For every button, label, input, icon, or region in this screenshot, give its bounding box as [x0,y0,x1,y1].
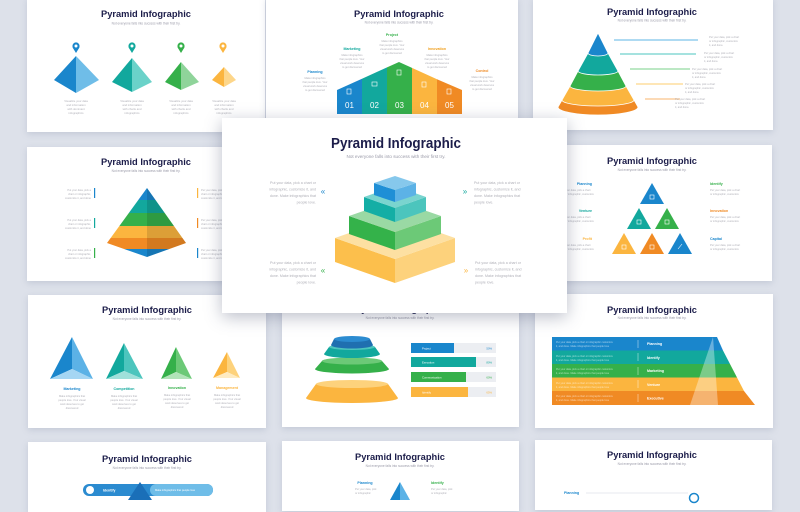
title: Pyramid Infographic [607,450,697,460]
title: Pyramid Infographic [101,9,191,19]
text blocks: infographics [68,111,84,115]
chart: progress bars: Communication [422,376,442,380]
text blocks: it, and done. [685,90,700,94]
text blocks: that people love. Your [425,57,450,61]
text blocks: or infographic, customize [704,55,733,59]
text blocks: Put your data, pick a chart [692,67,722,71]
slide: four 3D pyramids [28,295,266,428]
title: Not everyone falls into success with their first try. [618,18,686,22]
text: bottom-right: Put your data, pick a chart or [475,261,522,265]
chart: house bars [337,62,462,114]
text blocks: Make infographics that [164,393,190,397]
slide: bottom-right [535,440,772,510]
side text: Put your data, pick a [201,188,225,192]
text blocks: work deserves to get [165,401,189,405]
chart: bands: it, and done. Make infographics that people love [556,386,610,389]
text blocks: Make infographics [304,76,326,80]
text blocks: Put your data, pick a chart [709,35,739,39]
side text: Put your data, pick a [201,218,225,222]
title [102,305,192,321]
side text: chart or infographic, [201,222,224,226]
text blocks: it, and done. [675,105,690,109]
text blocks: Visualize your data [64,99,88,103]
side text: Put your data, pick a [67,188,92,192]
main slide: 3D stacked pyramid [222,118,567,313]
text blocks: that people love. Your [380,43,405,47]
text blocks [58,393,241,410]
labels: Profit [583,237,593,241]
chart: discs [306,336,398,403]
chart: bands: Put your data, pick a chart or infographic customize [556,341,613,344]
text: bottom-left: people love. [297,280,316,284]
text blocks: to get discovered [382,51,402,55]
slide: stacked discs with progress bars [282,294,519,427]
text blocks: visual work deserves [340,61,365,65]
chart: house bars: 02 [370,101,379,110]
text blocks: your data, pick a chart [565,215,591,219]
chart: bands: Put your data, pick a chart or infographic customize [556,355,613,358]
chart: bands: Put your data, pick a chart or infographic customize [556,395,613,398]
side text: customize it, and done [65,226,92,230]
text blocks: Put your data, pick a chart [675,97,705,101]
side text: Put your data, pick a [201,248,225,252]
slide: triangle grid [535,145,772,281]
bar: identify: Make infographics that people love [155,488,196,492]
chart: house bars: 01 [345,101,354,110]
text blocks: it, and done. [709,43,724,47]
chart: progress bars: 80% [486,360,493,364]
labels: Innovation [710,209,728,213]
text: top-left: infographic, customize it, and [269,188,316,192]
text: top-left: Put your data, pick a chart or [270,181,317,185]
text blocks: Make infographics [381,39,403,43]
title: Not everyone falls into success with their first try. [618,462,686,466]
text: bottom-left [269,261,317,284]
text: top-right: Put your data, pick a chart or [474,181,521,185]
text blocks: and information [122,103,142,107]
text blocks: discovered [66,406,79,410]
title [354,9,444,24]
side text [65,188,228,260]
text blocks: Visualize your data [120,99,144,103]
text blocks: or infographic, customize [675,101,704,105]
slide: bottom-left pill [28,442,266,512]
subtitle: Not everyone falls into success with their first try. [347,154,445,159]
text: top-right: done. Make infographics that [474,194,520,198]
title: Pyramid Infographic [102,305,192,315]
slide: cone pyramid [533,0,773,130]
pyramids [50,337,240,379]
text blocks: people love. Your visual [58,398,86,402]
text blocks [64,99,236,115]
text blocks [303,39,495,92]
text: top-left: done. Make infographics that [270,194,316,198]
chart: cone [558,33,638,115]
chart: bands: Put your data, pick a chart or infographic customize [556,382,613,385]
text blocks: discovered [118,406,131,410]
text blocks [675,35,739,109]
connector lines [614,40,698,99]
labels: Management [216,386,239,390]
title [607,7,697,22]
side text: Put your data, pick a [67,248,92,252]
chart: bands: Venture [647,383,660,387]
title: Not everyone falls into success with their first try. [618,168,686,172]
chart: bands: Marketing [647,369,664,373]
text blocks: Put your data, pick a chart [704,51,734,55]
text blocks: Put your data, pick a chart [710,188,740,192]
text blocks: people love. Your visual [163,397,191,401]
slide: layered tetra pyramid [26,147,222,284]
chart: house bars: 04 [420,101,429,110]
text blocks: or infographic, customize [710,219,739,223]
text blocks: infographics [173,111,189,115]
planning line: Planning [564,491,579,495]
side text: customize it, and done [201,256,228,260]
side text: chart or infographic, [68,192,91,196]
title: Not everyone falls into success with their first try. [113,466,181,470]
labels: Innovation [428,47,446,51]
text: bottom-right [475,261,522,284]
text: top-left: people love. [297,200,316,204]
title: Not everyone falls into success with their first try. [112,169,180,173]
title: Not everyone falls into success with their first try. [365,20,433,24]
chart: pyramid bands [107,188,186,257]
chart: bands: Identify [647,356,660,360]
chart: bands: Put your data, pick a chart or infographic customize [556,368,613,371]
labels: Control [476,69,488,73]
text blocks: Put your data, pick a chart [685,82,715,86]
bar: identify: Identify [103,488,115,492]
labels and pyramid [355,481,453,500]
title [607,156,697,172]
text blocks: or infographic, customize [692,71,721,75]
title (partly hidden) [355,304,445,320]
title: Not everyone falls into success with their first try. [113,317,181,321]
labels [307,33,488,74]
title: Pyramid Infographic [607,156,697,166]
title: Pyramid Infographic [607,305,697,315]
text blocks: to get discovered [472,87,492,91]
text blocks: or infographic, customize [565,192,594,196]
chart: progress bars: Execution [422,360,435,364]
text blocks: it, and done. [692,75,707,79]
text blocks: Visualize your data [212,99,236,103]
text: top-right: people love. [474,200,493,204]
pyramids [54,56,236,93]
side text: Put your data, pick a [67,218,92,222]
arrow: top-left: « [321,187,326,196]
title [101,9,191,26]
chart: bands: it, and done. Make infographics that people love [556,345,610,348]
slide: banded pyramid [535,294,773,428]
text blocks: with charts and [123,107,142,111]
text blocks: with charts and [172,107,191,111]
text blocks: Make infographics [341,53,363,57]
chart: bands: Planning [647,342,662,346]
slide: house bar chart [266,0,518,126]
text blocks: to get discovered [427,65,447,69]
chart: progress bars: 65% [486,390,493,394]
labels: Capital [710,237,722,241]
icon: pins [72,42,227,53]
side text: chart or infographic, [68,252,91,256]
slide: bottom-middle [282,441,519,511]
labels [577,182,728,241]
labels: Marketing [64,387,80,391]
arrow: top-right: » [463,187,468,196]
title [607,450,697,466]
chart: stacked blocks [335,176,455,283]
text blocks: Put your data, pick a chart [710,215,740,219]
labels and pyramid: Identify [431,481,444,485]
chart: house bars: 05 [445,101,454,110]
chart: bands: it, and done. Make infographics that people love [556,359,610,362]
planning line [564,491,698,502]
slide: four pin pyramids [27,0,265,132]
text blocks: and information [171,103,191,107]
text blocks: visual work deserves [470,83,495,87]
chart: bands: it, and done. Make infographics that people love [556,399,610,402]
chart: bands: Executive [647,396,664,400]
labels and pyramid: or infographic [431,491,447,495]
side text: chart or infographic, [201,192,224,196]
title: Pyramid Infographic [607,7,697,17]
title [102,454,192,470]
text: bottom-left: done. Make infographics that [270,274,316,278]
text blocks: work deserves to get [215,401,239,405]
text blocks: to get discovered [305,88,325,92]
text blocks: that people love. Your [303,80,328,84]
text blocks: infographics [216,111,232,115]
text: top-left [269,181,317,204]
text blocks: discovered [171,405,184,409]
text: bottom-right: done. Make infographics that [475,274,521,278]
labels: Marketing [344,47,360,51]
labels: Project [386,33,399,37]
labels: Competition [114,387,134,391]
text blocks: and information [214,103,234,107]
labels and pyramid: Put your data, pick [355,487,377,491]
title [355,452,445,468]
arrow: bottom-left: « [321,266,326,275]
text blocks: it, and done. [704,59,719,63]
chart: progress bars: Project [422,346,431,350]
title [101,157,191,173]
text blocks: Make infographics that [59,394,85,398]
text blocks: infographics [124,111,140,115]
labels and pyramid: Planning [357,481,373,485]
text blocks: your data, pick a chart [565,188,591,192]
text blocks: with dominant [67,107,85,111]
title: Not everyone falls into success with their first try. [366,464,434,468]
text blocks: or infographic, customize [685,86,714,90]
text blocks: your data, pick a chart [565,243,591,247]
labels [64,386,239,391]
text blocks: Put your data, pick a chart [710,243,740,247]
title (partly hidden): Pyramid Infographic [355,304,445,314]
text: bottom-right: infographic, customize it, and [475,268,522,272]
text: bottom-right: people love. [475,280,494,284]
text blocks: or infographic, customize [709,39,738,43]
text blocks: or infographic, customize [565,219,594,223]
text blocks: visual work deserves [425,61,450,65]
title [607,305,697,320]
title: Not everyone falls into success with their first try. [112,22,180,26]
title: Pyramid Infographic [102,454,192,464]
chart: progress bars: 50% [486,346,493,350]
side text: customize it, and done [65,256,92,260]
text blocks: that people love. Your [340,57,365,61]
side text: chart or infographic, [201,252,224,256]
text blocks: or infographic, customize [565,247,594,251]
text blocks: people love. Your visual [110,398,138,402]
text: bottom-left: infographic, customize it, and [269,268,316,272]
text blocks: Make infographics [471,75,493,79]
labels and pyramid: or infographic [355,491,371,495]
chart: progress bars: Identify [422,390,432,394]
title: Pyramid Infographic [331,135,461,152]
title: Not everyone falls into success with their first try. [618,316,686,320]
labels: Planning [307,70,323,74]
text blocks: work deserves to get [60,402,84,406]
arrow: bottom-right: » [464,266,469,275]
text blocks: that people love. Your [470,79,495,83]
text blocks: visual work deserves [303,84,328,88]
labels: Planning [577,182,592,186]
chart: house bars: 03 [395,101,404,110]
side text: customize it, and done [65,196,92,200]
side text: chart or infographic, [68,222,91,226]
text blocks: work deserves to get [112,402,136,406]
chart: progress bars: 60% [486,376,493,380]
text blocks: Make infographics that [214,393,240,397]
text blocks: and information [66,103,86,107]
title: Pyramid Infographic [355,452,445,462]
text blocks: or infographic, customize [710,192,739,196]
text blocks: with charts and [215,107,234,111]
text blocks: people love. Your visual [213,397,241,401]
text blocks: visual work deserves [380,47,405,51]
side text: customize it, and done [201,226,228,230]
title: Pyramid Infographic [101,157,191,167]
text: top-right [474,181,521,204]
chart: triangles [612,183,692,254]
text blocks: or infographic, customize [710,247,739,251]
text blocks: discovered [221,405,234,409]
text: bottom-left: Put your data, pick a chart or [270,261,317,265]
title (partly hidden): Not everyone falls into success with their first try. [366,316,434,320]
text blocks [565,188,740,251]
text blocks: Visualize your data [169,99,193,103]
title [331,135,461,159]
text blocks: to get discovered [342,65,362,69]
text blocks: Make infographics [426,53,448,57]
bar: identify [83,482,213,500]
side text: customize it, and done [201,196,228,200]
text blocks: Make infographics that [111,394,137,398]
text: top-right: infographic, customize it, and [474,188,521,192]
labels: Innovation [168,386,186,390]
labels and pyramid: Put your data, pick [431,487,453,491]
title: Pyramid Infographic [354,9,444,19]
chart: bands [552,337,755,405]
chart: bands: it, and done. Make infographics that people love [556,372,610,375]
labels: Venture [579,209,592,213]
labels: Identify [710,182,723,186]
chart: progress bars [411,343,496,397]
